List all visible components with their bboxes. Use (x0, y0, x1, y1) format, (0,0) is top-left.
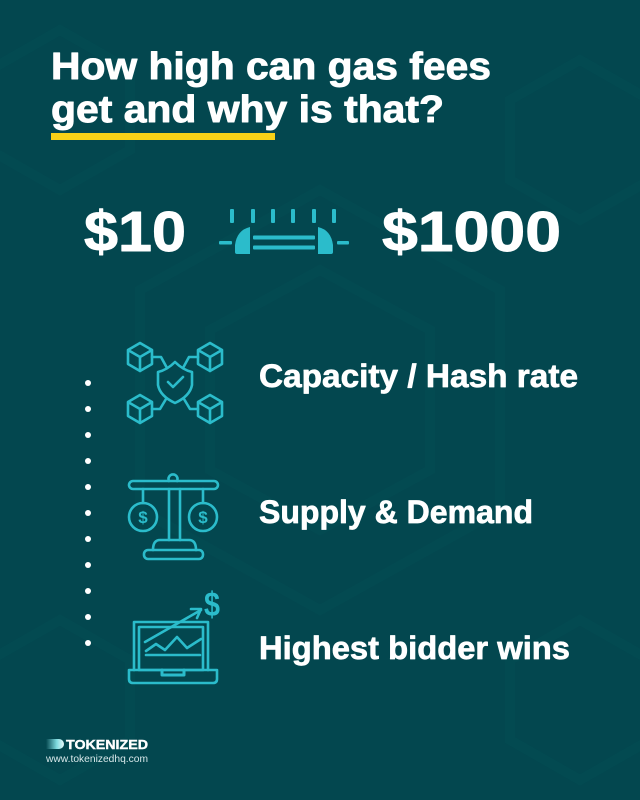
logo: www.tokenizedhq.com (45, 753, 148, 765)
icon: dollar signs on scale: $ (198, 508, 208, 527)
label: highest bidder: Highest bidder wins (259, 630, 570, 666)
title: get and why is that? (51, 89, 444, 131)
title (51, 46, 491, 131)
icon: blockchain shield (128, 343, 222, 423)
label: capacity: Capacity / Hash rate (259, 358, 578, 394)
label: supply and demand: Supply & Demand (259, 494, 533, 530)
low fee value: $10 (84, 200, 186, 264)
icon: dollar signs on scale: $ (138, 508, 148, 527)
title: How high can gas fees (51, 46, 491, 88)
icon: balance scale (129, 474, 218, 559)
icon: gas burner (219, 209, 349, 254)
high fee value: $1000 (382, 200, 561, 264)
icon: logo mark (46, 739, 64, 749)
title underline (51, 133, 275, 140)
dotted timeline (85, 380, 91, 646)
icon: dollar signs on scale (138, 508, 208, 527)
logo: TOKENIZED (66, 737, 148, 752)
icon: dollar sign above chart: $ (204, 586, 220, 624)
logo (45, 737, 148, 765)
icon: laptop with rising chart (129, 609, 217, 683)
